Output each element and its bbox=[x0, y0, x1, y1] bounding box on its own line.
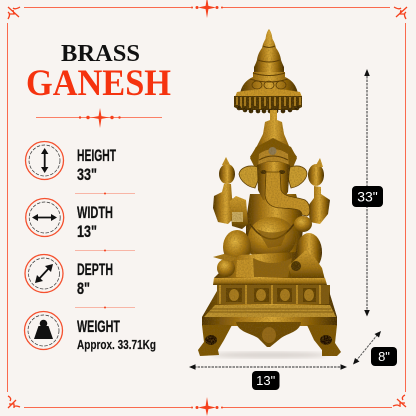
divider bbox=[75, 192, 135, 194]
sloped base bbox=[202, 291, 337, 326]
label: height: HEIGHT bbox=[77, 147, 116, 165]
shadow under statue bbox=[211, 352, 327, 358]
icon: depth arrow bbox=[25, 254, 63, 292]
right foot bbox=[307, 325, 341, 356]
lower right hand bbox=[294, 216, 312, 232]
badge: 8 inches: 8" bbox=[378, 349, 390, 364]
divider bbox=[75, 250, 135, 252]
label: depth: DEPTH bbox=[77, 261, 113, 279]
value: height: 33" bbox=[77, 166, 97, 184]
label: width: WIDTH bbox=[77, 204, 113, 222]
ears bbox=[239, 166, 259, 188]
ornament: top-right corner bbox=[394, 7, 407, 19]
ornament: top star bbox=[191, 0, 223, 18]
left knee bbox=[223, 230, 251, 264]
left foot bbox=[198, 325, 232, 356]
ornament: bottom-right corner bbox=[393, 395, 406, 407]
ornament: bottom star bbox=[191, 397, 223, 416]
spec: height bbox=[26, 142, 116, 184]
title line: BRASS: BRASS bbox=[61, 40, 140, 67]
mouse bbox=[288, 250, 325, 280]
icon: weight bbox=[24, 312, 62, 350]
title bbox=[26, 40, 171, 103]
center pendant bbox=[236, 322, 301, 347]
right knee bbox=[296, 233, 322, 271]
belly bbox=[248, 217, 296, 259]
badge: 33 inches bbox=[352, 186, 383, 207]
badge: 33 inches: 33" bbox=[357, 188, 378, 204]
ball and foot bbox=[213, 254, 252, 277]
icon: width arrow bbox=[26, 198, 64, 236]
seated lap bbox=[214, 252, 300, 278]
value: width: 13" bbox=[77, 223, 97, 241]
raised hand bbox=[230, 196, 248, 229]
badge: 8 inches bbox=[371, 347, 397, 366]
head bbox=[257, 162, 290, 200]
upper left arm and conch bbox=[213, 157, 238, 224]
icon: height arrow bbox=[26, 142, 64, 180]
statue: brass Ganesh bbox=[198, 29, 341, 356]
torso bbox=[246, 194, 304, 262]
upper right arm and conch bbox=[308, 158, 330, 224]
ornament: top-left corner bbox=[8, 7, 20, 19]
frieze bbox=[217, 285, 330, 306]
platform top bbox=[213, 278, 327, 285]
crown bbox=[250, 138, 297, 172]
badge: 13 inches bbox=[252, 371, 280, 390]
title divider bbox=[36, 108, 162, 128]
dimension: width arrow bbox=[189, 364, 347, 370]
divider bbox=[75, 306, 135, 308]
label: weight: WEIGHT bbox=[77, 318, 120, 336]
value: weight: Approx. 33.71Kg bbox=[77, 338, 156, 352]
spec: weight bbox=[24, 312, 156, 352]
ornament: bottom-left corner bbox=[8, 396, 20, 408]
crown stem bbox=[250, 110, 297, 157]
dimension: depth arrow bbox=[353, 331, 381, 364]
title line: GANESH: GANESH bbox=[26, 62, 171, 103]
value: depth: 8" bbox=[77, 280, 90, 298]
trunk bbox=[265, 172, 310, 216]
dimension: height arrow bbox=[364, 69, 370, 316]
badge: 13 inches: 13" bbox=[256, 373, 276, 388]
spec: width bbox=[26, 198, 113, 241]
spec: depth bbox=[25, 254, 113, 298]
umbrella bbox=[234, 29, 302, 113]
